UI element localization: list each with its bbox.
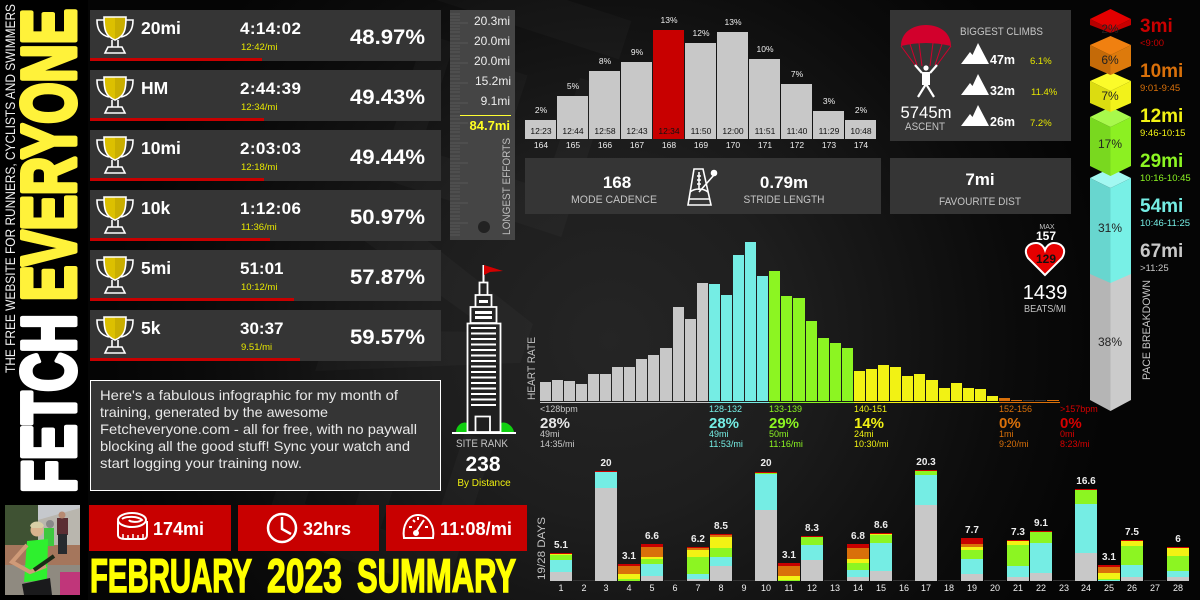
day axis: 16 <box>899 583 909 593</box>
panel: distance: 174mi <box>153 519 204 539</box>
panel: ascent and climbs: BIGGEST CLIMBS <box>960 26 1043 38</box>
cadence axis labels: 165 <box>566 140 580 150</box>
day 3: 20 <box>600 458 612 469</box>
day 25: 3.1 <box>1102 552 1116 563</box>
zone: 152-156: 1mi <box>999 429 1014 439</box>
day axis: 11 <box>784 583 794 593</box>
best: 5k: 30:37 <box>240 319 283 338</box>
day axis: 27 <box>1150 583 1160 593</box>
day axis: 18 <box>944 583 954 593</box>
day 10: 20 <box>760 458 772 469</box>
cadence axis labels: 169 <box>694 140 708 150</box>
day 7: 6.2 <box>691 534 705 545</box>
zone: 133-139: 133-139 <box>769 404 802 414</box>
day axis: 26 <box>1127 583 1137 593</box>
panel: cadence and stride <box>525 158 881 214</box>
zone: 128-132 <box>709 404 743 449</box>
day 1 <box>550 540 572 581</box>
legend: 10mi: 10mi <box>1140 61 1183 82</box>
pace axis title: PACE BREAKDOWN <box>1141 280 1153 380</box>
zone: 133-139: 29% <box>769 415 799 432</box>
legend: 12mi: 9:46-10:15 <box>1140 128 1185 139</box>
day 8 <box>710 521 732 581</box>
pace share labels: 7% <box>1101 89 1119 103</box>
bars: 133-139 <box>769 271 853 401</box>
pace stack <box>1090 9 1131 411</box>
cadence axis labels: 170 <box>726 140 740 150</box>
cadence share labels: 13% <box>660 15 678 25</box>
panel: longest efforts ruler: 20.3mi <box>474 14 510 28</box>
best: HM <box>90 70 441 121</box>
cadence bar chart <box>525 15 876 150</box>
cadence axis labels: 168 <box>662 140 676 150</box>
legend: 3mi: 3mi <box>1140 16 1173 37</box>
cadence axis labels: 174 <box>854 140 868 150</box>
heart rate summary: 1439 <box>1023 282 1067 304</box>
day axis: 2 <box>581 583 587 593</box>
icon: speedometer <box>404 515 433 538</box>
zone: 140-151: 140-151 <box>854 404 887 414</box>
zone: above 157: >157bpm <box>1060 404 1098 414</box>
best: 10k: 10k <box>141 198 170 218</box>
cadence pace labels <box>530 126 872 136</box>
panel: favourite distance: FAVOURITE DIST <box>939 196 1021 208</box>
zone: below 128 <box>540 404 578 449</box>
bars: 128-132 <box>709 242 768 401</box>
cadence share labels: 12% <box>692 28 710 38</box>
day 5: 6.6 <box>645 531 659 542</box>
panel: longest efforts ruler: LONGEST EFFORTS <box>501 138 513 235</box>
day 15 <box>870 520 892 581</box>
panel: longest efforts ruler: 15.2mi <box>475 74 511 88</box>
zone: below 128: 14:35/mi <box>540 439 575 449</box>
day 24: 16.6 <box>1076 476 1096 487</box>
axis title: HEART RATE <box>526 337 538 400</box>
day 21 <box>1007 527 1029 581</box>
day 19: 7.7 <box>965 525 979 536</box>
heart rate summary: 157 <box>1036 229 1056 243</box>
panel: ascent and climbs: ASCENT <box>905 121 945 133</box>
cadence pace labels: 10:48 <box>850 126 872 136</box>
zone: 140-151: 10:30/mi <box>854 439 889 449</box>
best: 5mi: 51:01 <box>240 259 283 278</box>
legend: 29mi <box>1140 151 1191 184</box>
day axis: 3 <box>603 583 609 593</box>
photo <box>5 505 80 595</box>
text block: intro message: blocking all the good stuff! Sync your watch and <box>100 438 410 454</box>
zone: 128-132: 128-132 <box>709 404 742 414</box>
pace share labels: 17% <box>1098 137 1122 151</box>
zone: 140-151: 14% <box>854 415 884 432</box>
panel: distance <box>89 505 231 551</box>
cadence axis labels: 164 <box>534 140 548 150</box>
panel: cadence and stride: 168 <box>603 173 631 192</box>
zone: 133-139: 50mi <box>769 429 789 439</box>
day axis: 6 <box>672 583 678 593</box>
day 4 <box>618 551 640 581</box>
day 28: 6 <box>1175 534 1181 545</box>
best: 5mi: 57.87% <box>350 266 425 289</box>
pace share labels <box>1098 22 1122 349</box>
zone: 140-151: 24mi <box>854 429 874 439</box>
pace share labels: 6% <box>1101 53 1119 67</box>
day axis: 4 <box>626 583 632 593</box>
day 24 <box>1075 476 1097 581</box>
panel: longest efforts ruler: 9.1mi <box>481 94 510 108</box>
legend: 54mi <box>1140 196 1190 229</box>
day axis: 5 <box>649 583 655 593</box>
best: 10k <box>90 190 441 241</box>
site rank: SITE RANK <box>456 438 509 450</box>
cadence pace labels: 12:44 <box>562 126 584 136</box>
best: 20mi: 12:42/mi <box>241 42 277 53</box>
day axis: 22 <box>1036 583 1046 593</box>
best: 10k: 11:36/mi <box>241 222 277 233</box>
heart rate summary <box>1023 224 1067 315</box>
cadence axis labels: 166 <box>598 140 612 150</box>
zone baseline <box>540 402 1060 403</box>
pace: under 9:00 <box>1090 9 1131 33</box>
best: HM: 2:44:39 <box>240 79 301 98</box>
best: HM: 49.43% <box>350 86 425 109</box>
legend: 10mi <box>1140 61 1183 94</box>
cadence pace labels: 11:40 <box>787 126 808 136</box>
zone: below 128: 49mi <box>540 429 560 439</box>
day 21: 7.3 <box>1011 527 1025 538</box>
best: 10k: 50.97% <box>350 206 425 229</box>
cadence pace labels: 11:50 <box>691 126 712 136</box>
pace: over 11:25 <box>1090 250 1131 411</box>
cadence share labels: 2% <box>855 105 868 115</box>
pace: 10:46-11:25 <box>1090 168 1131 283</box>
cadence pace labels: 11:51 <box>755 126 776 136</box>
legend: 3mi: <9:00 <box>1140 38 1164 49</box>
cadence pace labels: 12:34 <box>658 126 680 136</box>
climb 1 <box>961 43 1052 67</box>
day axis <box>558 583 1183 593</box>
climb 3: 26m <box>990 115 1015 129</box>
zone: below 128: <128bpm <box>540 404 578 414</box>
climb 2 <box>961 74 1058 98</box>
best: 5mi: 5mi <box>141 258 171 278</box>
day 12 <box>801 523 823 581</box>
day 15: 8.6 <box>874 520 888 531</box>
zone: 128-132: 28% <box>709 415 739 432</box>
day 7 <box>687 534 709 581</box>
zone: 152-156: 0% <box>999 415 1021 432</box>
climb 1: 47m <box>990 53 1015 67</box>
best: 20mi: 48.97% <box>350 26 425 49</box>
legend: 29mi: 10:16-10:45 <box>1140 173 1191 184</box>
best: 10mi: 2:03:03 <box>240 139 301 158</box>
day 19 <box>961 525 983 581</box>
logo <box>7 9 92 493</box>
day 26 <box>1121 527 1143 581</box>
day 25 <box>1098 552 1120 581</box>
pace: 9:01-9:45 <box>1090 36 1131 75</box>
heart rate histogram <box>526 242 1060 403</box>
day axis: 19 <box>967 583 977 593</box>
cadence share labels: 9% <box>631 47 644 57</box>
legend: 54mi: 54mi <box>1140 196 1183 217</box>
climb 1: 6.1% <box>1030 56 1052 67</box>
pace share labels: 31% <box>1098 221 1122 235</box>
climb 3 <box>961 105 1052 129</box>
cadence pace labels: 12:23 <box>530 126 552 136</box>
legend: 10mi: 9:01-9:45 <box>1140 83 1180 94</box>
heart rate summary: MAX <box>1039 224 1055 231</box>
best: HM: HM <box>141 78 168 98</box>
zone: above 157: 0mi <box>1060 429 1075 439</box>
day axis: 23 <box>1059 583 1069 593</box>
best: 5mi <box>90 250 441 301</box>
pace: 10:16-10:45 <box>1090 107 1131 176</box>
cadence axis labels <box>534 140 868 150</box>
day 22: 9.1 <box>1034 518 1048 529</box>
best: 5k: 59.57% <box>350 326 425 349</box>
legend: 54mi: 10:46-11:25 <box>1140 218 1190 229</box>
day 17: 20.3 <box>916 457 936 468</box>
icon: metronome <box>688 169 716 205</box>
best: 5k <box>90 310 441 361</box>
climb 2: 11.4% <box>1031 87 1058 98</box>
zone: 152-156 <box>999 404 1032 449</box>
day 17 <box>915 457 937 581</box>
day 11: 3.1 <box>782 550 796 561</box>
panel: average pace <box>386 505 527 551</box>
pace legend <box>1140 16 1191 274</box>
day 14 <box>847 531 869 581</box>
day 26: 7.5 <box>1125 527 1139 538</box>
icon: skyscraper <box>452 265 516 434</box>
day axis: 24 <box>1081 583 1091 593</box>
cadence pace labels: 12:58 <box>594 126 616 136</box>
day 28 <box>1167 534 1189 581</box>
day 12: 8.3 <box>805 523 819 534</box>
panel: longest efforts ruler: 20.0mi <box>474 34 510 48</box>
best: 20mi: 20mi <box>141 18 181 38</box>
day 10 <box>755 458 777 581</box>
day 4: 3.1 <box>622 551 636 562</box>
legend: 12mi: 12mi <box>1140 106 1183 127</box>
heart rate summary: BEATS/MI <box>1024 303 1066 315</box>
panel: favourite distance: 7mi <box>965 170 995 189</box>
panel: duration: 32hrs <box>303 519 351 539</box>
legend: 67mi <box>1140 241 1183 274</box>
legend: 12mi <box>1140 106 1185 139</box>
pace share labels: 2% <box>1101 22 1119 36</box>
day axis: 12 <box>807 583 817 593</box>
day axis: 15 <box>876 583 886 593</box>
best: 10mi: 12:18/mi <box>241 162 277 173</box>
day axis: 1 <box>558 583 564 593</box>
climb 2: 32m <box>990 84 1015 98</box>
day axis: 8 <box>718 583 724 593</box>
cadence share labels: 2% <box>535 105 548 115</box>
best: 10mi: 49.44% <box>350 146 425 169</box>
zone: 140-151 <box>854 404 889 449</box>
icon: tape measure <box>118 513 147 539</box>
day 14: 6.8 <box>851 531 865 542</box>
best: 10k: 1:12:06 <box>240 199 301 218</box>
zone: above 157 <box>1060 404 1098 449</box>
zone: 152-156: 9:20/mi <box>999 439 1029 449</box>
bars: below 128bpm <box>540 283 708 401</box>
cadence axis labels: 172 <box>790 140 804 150</box>
day axis: 9 <box>741 583 747 593</box>
panel: average pace: 11:08/mi <box>440 519 512 539</box>
panel: cadence and stride: STRIDE LENGTH <box>744 194 825 206</box>
day axis: 28 <box>1173 583 1183 593</box>
zone: 133-139 <box>769 404 803 449</box>
panel: longest efforts ruler: 20.0mi <box>474 54 510 68</box>
day 5 <box>641 531 663 581</box>
day 3 <box>595 458 617 581</box>
zone: 128-132: 11:53/mi <box>709 439 743 449</box>
daily chart <box>536 457 1189 593</box>
logo: FETCH <box>7 314 92 493</box>
day 1: 5.1 <box>554 540 568 551</box>
zone: below 128: 28% <box>540 415 570 432</box>
best: 20mi <box>90 10 441 61</box>
cadence pace labels: 11:29 <box>819 126 840 136</box>
best: 20mi: 4:14:02 <box>240 19 301 38</box>
cadence share labels: 5% <box>567 81 580 91</box>
legend: 67mi: >11:25 <box>1140 263 1169 274</box>
day axis: 14 <box>853 583 863 593</box>
rest days <box>573 580 1166 581</box>
zone: 128-132: 49mi <box>709 429 729 439</box>
day 22 <box>1030 518 1052 581</box>
pace share labels: 38% <box>1098 335 1122 349</box>
site rank: 238 <box>465 453 501 476</box>
pace: 9:46-10:15 <box>1090 72 1131 112</box>
day axis: 17 <box>921 583 931 593</box>
day axis: 13 <box>830 583 840 593</box>
cadence axis labels: 167 <box>630 140 644 150</box>
zone: above 157: 0% <box>1060 415 1082 432</box>
cadence axis labels: 173 <box>822 140 836 150</box>
day axis: 20 <box>990 583 1000 593</box>
cadence bars <box>525 30 876 139</box>
title <box>90 549 516 600</box>
zone: above 157: 8:23/mi <box>1060 439 1090 449</box>
panel: longest efforts ruler <box>450 10 515 240</box>
cadence share labels: 3% <box>823 96 836 106</box>
best: HM: 12:34/mi <box>241 102 277 113</box>
heart rate zones <box>540 404 1098 449</box>
panel: ascent and climbs <box>890 10 1071 141</box>
climb 3: 7.2% <box>1030 118 1052 129</box>
site rank: By Distance <box>457 478 511 489</box>
icon: clock <box>268 514 296 542</box>
zone: 152-156: 152-156 <box>999 404 1032 414</box>
bars: 152 and above <box>999 398 1059 401</box>
cadence share labels: 8% <box>599 56 612 66</box>
cadence share labels: 13% <box>724 17 742 27</box>
cadence share labels: 10% <box>756 44 774 54</box>
best: 10mi: 10mi <box>141 138 181 158</box>
best: 5k: 5k <box>141 318 161 338</box>
panel: personal bests <box>90 10 441 361</box>
cadence pace labels: 12:00 <box>722 126 744 136</box>
day 11 <box>778 550 800 581</box>
site rank <box>452 265 516 489</box>
day axis: 21 <box>1013 583 1023 593</box>
cadence share labels: 7% <box>791 69 804 79</box>
legend: 67mi: 67mi <box>1140 241 1183 262</box>
best: 5mi: 10:12/mi <box>241 282 277 293</box>
day axis: 10 <box>761 583 771 593</box>
heart rate summary: 129 <box>1036 252 1056 266</box>
panel: duration <box>238 505 379 551</box>
axis title: 19/28 DAYS <box>536 517 548 580</box>
panel: cadence and stride: MODE CADENCE <box>571 194 657 206</box>
panel: cadence and stride: 0.79m <box>760 173 808 192</box>
panel: favourite distance <box>890 158 1071 214</box>
icon: heart <box>1026 243 1064 275</box>
bars: 140-151 <box>854 365 998 401</box>
best: 10mi <box>90 130 441 181</box>
zone: 133-139: 11:16/mi <box>769 439 803 449</box>
panel: ascent and climbs: 5745m <box>900 103 952 122</box>
day axis: 7 <box>695 583 701 593</box>
cadence axis labels: 171 <box>758 140 772 150</box>
best: 5k: 9.51/mi <box>241 342 272 353</box>
cadence pace labels: 12:43 <box>626 126 648 136</box>
panel: longest efforts ruler: 84.7mi <box>470 118 510 133</box>
text block: intro message: Here's a fabulous infographic for my month of <box>100 387 398 403</box>
text block: intro message <box>90 380 440 490</box>
text block: intro message: training, generated by the awesome <box>100 404 328 420</box>
cadence share labels <box>535 15 868 115</box>
text block: intro message: start logging your training now. <box>100 455 302 471</box>
day axis: 25 <box>1104 583 1114 593</box>
legend: 29mi: 29mi <box>1140 151 1183 172</box>
legend: 3mi <box>1140 16 1173 49</box>
day 8: 8.5 <box>714 521 728 532</box>
icon: parachutist <box>901 25 951 97</box>
text block: intro message: Fetcheveryone.com - all for free, with no paywall <box>100 421 417 437</box>
